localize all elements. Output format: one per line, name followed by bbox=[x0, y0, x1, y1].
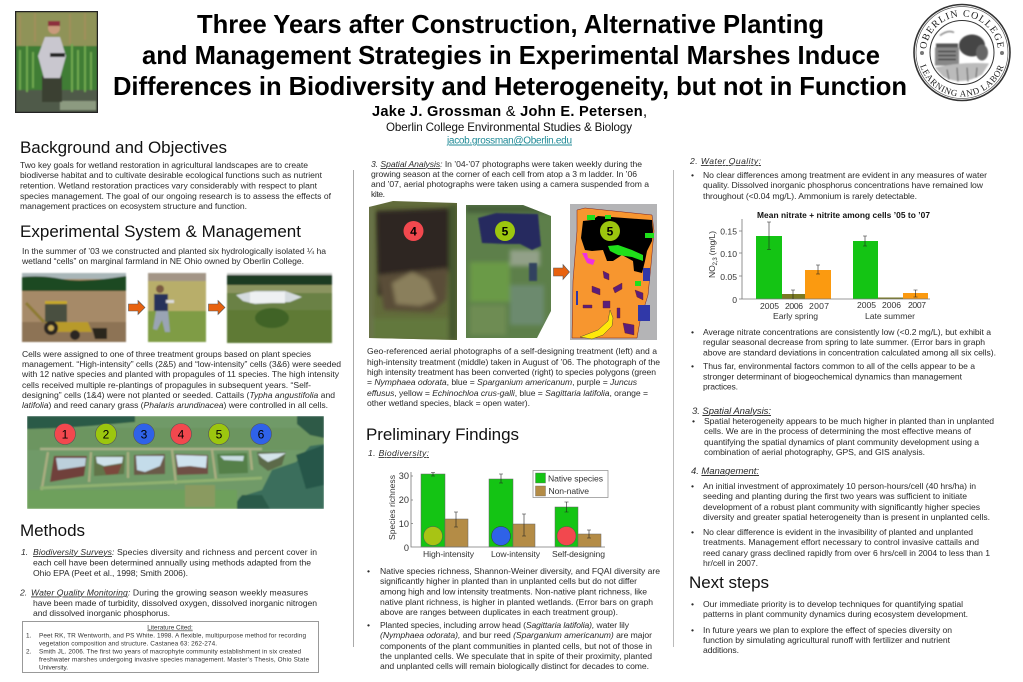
bullet text: future years: function by simulating agricultural runoff with fertilizer and nutrient bbox=[703, 635, 951, 645]
bullet text: priority: Our immediate priority is to develop techniques for quantifying spatial bbox=[703, 599, 963, 609]
text block: treatment groups: with 12 native species and planted with propagules of 11 species. The high intensity bbox=[21, 369, 340, 379]
bar chart: species richness bbox=[387, 470, 608, 559]
affiliation: Oberlin College Environmental Studies & Biology bbox=[386, 121, 632, 134]
bullet text: richness: among high and low intensity treatments. Non-native plant richness, like bbox=[380, 586, 647, 596]
caption bbox=[367, 346, 660, 408]
y axis tick labels: 20 bbox=[399, 495, 409, 505]
species polygon map bbox=[570, 204, 657, 340]
text block: treatment groups: Cells were assigned to one of three treatment groups based on plant species bbox=[22, 349, 311, 359]
intro text: wetland “cells” on marginal farmland in NE Ohio owned by Oberlin College. bbox=[21, 256, 304, 266]
bullet text: future years: In future years we plan to explore the effect of species diversity on bbox=[703, 625, 952, 635]
text block: treatment groups: cells received multiple re-plantings of propagules in subsequent years. “Self- bbox=[22, 380, 311, 390]
treatment circles bbox=[424, 526, 442, 546]
chart title: Mean nitrate + nitrite among cells ’05 to ’07 bbox=[757, 210, 930, 220]
y axis tick labels: 0 bbox=[732, 295, 737, 305]
y axis tick labels: 0 bbox=[404, 543, 409, 553]
photo: restored wetland bbox=[227, 273, 332, 343]
species polygon map: 5 bbox=[607, 224, 614, 238]
bullet text: nitrate: above are standard deviations in concentration calculated among all six cells). bbox=[703, 348, 996, 358]
icon: Oberlin College seal bbox=[913, 4, 1011, 102]
bullet text: richness bbox=[367, 566, 660, 617]
bullet text: investment: diversity and greater spatial heterogeneity than is present in unplanted cells. bbox=[703, 512, 990, 522]
photo: high-intensity cell 5 bbox=[466, 205, 551, 338]
panel: spatial analysis method bbox=[367, 159, 660, 408]
literature cited box: University. bbox=[39, 664, 68, 672]
email: jacob.grossman@Oberlin.edu bbox=[446, 136, 572, 146]
text block: treatment groups: designing” cells (1&4) were not planted or seeded. Cattails (Typha angustifolia and bbox=[22, 390, 335, 400]
legend bbox=[533, 470, 608, 498]
bullet text: investment: An initial investment of approximately 10 person-hours/cell (40 hrs/ha) in bbox=[703, 481, 976, 491]
legend: Non-native bbox=[548, 486, 589, 496]
y axis tick labels: 0.05 bbox=[720, 272, 737, 282]
method 1: each cell have been determined annually using methods adapted from the bbox=[33, 558, 311, 568]
x axis labels: 2007 bbox=[908, 300, 926, 310]
cell number markers: 3 bbox=[141, 428, 148, 442]
panel: preliminary findings bbox=[366, 425, 660, 671]
y axis tick labels: 0.10 bbox=[720, 249, 737, 259]
y axis tick labels: 10 bbox=[399, 519, 409, 529]
bars bbox=[421, 474, 601, 547]
caption: effusus, yellow = Echinochloa crus-galli, blue = Sagittaria latifolia, orange = bbox=[367, 388, 648, 398]
text block: retention. Wetland restoration practices vary considerably with respect to plant bbox=[20, 180, 318, 190]
bullet text: environmental factors bbox=[691, 361, 975, 392]
text block: management practices on ecosystem structure and function. bbox=[20, 201, 247, 211]
bullet text: future years: • bbox=[691, 625, 694, 635]
y axis title: Species richness bbox=[387, 475, 397, 540]
panel: spatial analysis findings bbox=[692, 406, 994, 457]
method 2: 2. bbox=[19, 588, 27, 598]
arrow bbox=[554, 264, 570, 280]
title: Differences in Biodiversity and Heterogeneity, but not in Function bbox=[113, 73, 907, 101]
photo: planting in field bbox=[148, 273, 206, 342]
literature cited box: freshwater marshes undergoing invasive species management. Master’s Thesis, Ohio State bbox=[39, 656, 309, 664]
bullet text: planted species bbox=[367, 620, 652, 671]
subheading: 4. Management: bbox=[691, 466, 759, 477]
heading: Experimental System & Management bbox=[20, 222, 301, 241]
literature cited box: vegetation composition and structure. Castanea 63: 262-274. bbox=[39, 640, 217, 648]
legend: Native species bbox=[548, 474, 603, 484]
arrow bbox=[208, 300, 225, 314]
x axis labels: 2007 bbox=[809, 301, 829, 311]
bullet text: priority: • bbox=[691, 599, 694, 609]
text block: growing season at the corner of each cell from atop a 3 m ladder. In ’06 bbox=[371, 169, 637, 179]
bullet text bbox=[692, 416, 994, 457]
caption: high-intensity treatment (middle) taken in August of ’06. The photograph of the bbox=[367, 357, 660, 367]
cell number markers: 4 bbox=[178, 428, 185, 442]
heading: Preliminary Findings bbox=[366, 425, 519, 444]
bullet text: invasibility: hr/cell in 2007. bbox=[703, 558, 758, 568]
bullet text: nitrate: • bbox=[691, 327, 694, 337]
bullet text: invasibility bbox=[691, 527, 990, 568]
x axis labels: Low-intensity bbox=[491, 549, 541, 559]
x axis labels: 2006 bbox=[785, 301, 803, 311]
bullet text: richness: Native species richness, Shannon-Weiner diversity, and FQAI diversity are bbox=[380, 566, 660, 576]
bullet text: planted species: (Nymphaea odorata), and bur reed (Sparganium americanum) are major bbox=[380, 630, 652, 640]
literature cited box: Smith JL. 2006. The first two years of macrophyte community establishment in six created bbox=[39, 648, 301, 656]
bullet text: future years bbox=[691, 625, 952, 655]
literature cited box: 1. bbox=[26, 632, 32, 640]
bullet text: planted species: and unplanted cells will remain biologically distinct for decades to come. bbox=[380, 661, 649, 671]
heading: Background and Objectives bbox=[20, 138, 227, 157]
literature cited box bbox=[22, 622, 318, 672]
caption: high intensity treatment has been converted (right) to species polygons (green bbox=[367, 367, 656, 377]
bullet text bbox=[691, 170, 987, 201]
bullet text: planted species: Planted species, including arrow head (Sagittaria latifolia), water lily bbox=[380, 620, 630, 630]
method 2: and dissolved inorganic phosphorus. bbox=[33, 608, 170, 618]
x axis labels: Late summer bbox=[865, 311, 915, 321]
title: Three Years after Construction, Alternative Planting bbox=[197, 11, 824, 39]
column rule right bbox=[673, 170, 674, 647]
bullet text: environmental factors: stronger determinant of biogeochemical dynamics than management bbox=[703, 372, 963, 382]
bullet text: invasibility: • bbox=[691, 527, 694, 537]
text block: and ’07, aerial photographs were taken using a camera suspended from a bbox=[371, 179, 649, 189]
cell number markers: 2 bbox=[103, 428, 110, 442]
panel: background and objectives bbox=[20, 138, 332, 211]
method 1 bbox=[21, 547, 317, 578]
bullet text: richness: significantly higher in planted than in unplanted cells but do not differ bbox=[380, 576, 637, 586]
panel: experimental system and management bbox=[20, 222, 341, 509]
cell number markers: 6 bbox=[258, 428, 265, 442]
arrow bbox=[128, 300, 145, 314]
bullet text: priority: patterns in plant community dynamics during ecosystem development. bbox=[703, 609, 968, 619]
literature cited box: Peet RK, TR Wentworth, and PS White. 1998. A flexible, multipurpose method for recording bbox=[39, 632, 306, 640]
bullet text: planted species: components of the plant communities in planted cells, but not of those in bbox=[380, 641, 652, 651]
text block: kite. bbox=[371, 189, 385, 199]
method 2: have been made of turbidity, dissolved oxygen, dissolved inorganic nitrogen bbox=[33, 598, 317, 608]
bullet text: priority bbox=[691, 599, 968, 619]
axes bbox=[411, 472, 605, 547]
bullet text: invasibility: treatments. Management effort necessary to control invasive cattails and bbox=[703, 537, 979, 547]
bullet text: planted species: the unplanted cells. We speculate that in spite of their proximity, planted bbox=[380, 651, 652, 661]
caption: other wetland species, black = open water). bbox=[367, 398, 530, 408]
photo: high-intensity cell 5: 5 bbox=[502, 224, 509, 238]
bullet text: quantifying the spatial dynamics of plant community development using a bbox=[704, 437, 979, 447]
bullet text: future years: additions. bbox=[703, 645, 739, 655]
column rule left bbox=[353, 170, 354, 647]
bullet text: investment bbox=[691, 481, 990, 522]
method 1: Biodiversity Surveys: Species diversity and richness and percent cover in bbox=[33, 547, 317, 557]
bullet text: nitrate bbox=[691, 327, 996, 358]
y axis title: NO bbox=[707, 265, 717, 278]
bullet text: quality. Dissolved inorganic phosphorus concentrations have remained low bbox=[703, 180, 984, 190]
bullet text: investment: development of a robust plant community with significantly higher species bbox=[703, 502, 980, 512]
icon: Oberlin College seal: OBERLIN COLLEGE bbox=[920, 10, 1004, 48]
text block: 3. Spatial Analysis: In ’04-’07 photographs were taken weekly during the bbox=[371, 159, 642, 169]
photo: self-designing cell 4: 4 bbox=[410, 224, 417, 238]
bullet text: investment: seeding and planting during the first two years was sufficient to initiate bbox=[703, 491, 967, 501]
text block bbox=[371, 159, 649, 199]
error bars bbox=[767, 222, 918, 299]
subheading: 2. Water Quality: bbox=[689, 156, 762, 166]
error bars bbox=[431, 472, 591, 538]
text block: treatment groups: management. “High-intensity” cells (2&5) and “low-intensity” cells (3&6) were seeded bbox=[22, 359, 341, 369]
caption: Geo-referenced aerial photographs of a self-designing treatment (left) and a bbox=[367, 346, 657, 356]
y axis tick labels: 30 bbox=[399, 471, 409, 481]
method 1: 1. bbox=[21, 547, 28, 557]
bullet text: richness: • bbox=[367, 566, 370, 576]
authors: Jake J. Grossman & John E. Petersen, bbox=[372, 104, 647, 120]
literature cited box: Literature Cited: bbox=[147, 624, 193, 632]
bullet text: richness: above are ranges between duplicates in each treatment group). bbox=[380, 607, 618, 617]
x axis labels: Early spring bbox=[773, 311, 818, 321]
y axis tick labels bbox=[399, 471, 409, 553]
subheading: 3. Spatial Analysis: bbox=[692, 406, 771, 417]
cell number markers: 5 bbox=[216, 428, 223, 442]
bullet text: cells. We are in the process of determining the most effective means of bbox=[704, 426, 972, 436]
bullet text: planted species: • bbox=[367, 620, 370, 630]
y axis tick labels: 0.15 bbox=[720, 226, 737, 236]
heading: Methods bbox=[20, 521, 85, 540]
literature cited box: 2. bbox=[26, 648, 32, 656]
title: and Management Strategies in Experimental Marshes Induce bbox=[142, 42, 880, 70]
bullet text: invasibility: reed canary grass declined rapidly from over 6 hrs/cell in 2004 to less than 1 bbox=[703, 548, 990, 558]
icon: Oberlin College seal: LEARNING AND LABOR bbox=[920, 64, 1004, 97]
photo: backhoe on bare soil bbox=[22, 273, 126, 342]
text block: biodiverse habitat and to cultivate desirable ecological functions such as nutrient bbox=[20, 170, 323, 180]
heading: Next steps bbox=[689, 573, 769, 592]
panel: management bbox=[691, 466, 990, 568]
x axis labels: 2006 bbox=[882, 300, 901, 310]
bullet text: environmental factors: practices. bbox=[703, 382, 738, 392]
bullet text: investment: • bbox=[691, 481, 694, 491]
bullet text: throughout (<0.04 mg/L). Ammonium is rarely detectable. bbox=[703, 191, 917, 201]
axes bbox=[739, 219, 930, 299]
bullet text: • bbox=[692, 416, 695, 426]
caption: = Nymphaea odorata, blue = Sparganium americanum, purple = Juncus bbox=[367, 377, 638, 387]
bars bbox=[756, 236, 928, 299]
bar chart: nitrate + nitrite bbox=[707, 210, 930, 321]
bullet text: No clear differences among treatment are evident in any measures of water bbox=[703, 170, 987, 180]
intro text bbox=[21, 246, 326, 266]
bullet text: nitrate: Average nitrate concentrations are consistently low (<0.2 mg/L), but exhibit a bbox=[703, 327, 991, 337]
method 2 bbox=[19, 588, 317, 618]
bullet text: • bbox=[691, 170, 694, 180]
text block bbox=[20, 160, 332, 211]
bullet text: invasibility: No clear difference is evident in the invasibility of planted and unplanted bbox=[703, 527, 973, 537]
bullet text: richness: native plant richness, is higher in planted wetlands. (Error bars on graph bbox=[380, 597, 653, 607]
cell number markers bbox=[54, 424, 272, 444]
text block: Two key goals for wetland restoration in agricultural landscapes are to create bbox=[20, 160, 308, 170]
y axis title: (mg/L) bbox=[707, 231, 717, 257]
bullet text: nitrate: regular seasonal decrease from spring to late summer. (Error bars in graph bbox=[703, 337, 985, 347]
intro text: In the summer of ’03 we constructed and planted six hydrologically isolated ¼ ha bbox=[22, 246, 326, 256]
y axis title: 2,3 bbox=[713, 257, 719, 265]
x axis labels bbox=[423, 549, 605, 559]
photo: self-designing cell 4 bbox=[369, 201, 457, 340]
x axis labels: 2005 bbox=[760, 301, 779, 311]
x axis labels: High-intensity bbox=[423, 549, 475, 559]
panel: methods bbox=[19, 521, 318, 672]
method 2: Water Quality Monitoring: During the growing season weekly measures bbox=[31, 588, 308, 598]
text block: treatment groups bbox=[21, 349, 341, 410]
bullet text: Spatial heterogeneity appears to be much higher in planted than in unplanted bbox=[704, 416, 994, 426]
text block: treatment groups: latifolia) and reed canary grass (Phalaris arundinacea) were controlled in all cells. bbox=[22, 400, 328, 410]
panel: water quality bbox=[689, 156, 996, 392]
text block: species management. The goal of our ongoing research is to assess the effects of bbox=[20, 191, 332, 201]
y axis tick labels bbox=[720, 226, 737, 305]
method 1: Ohio EPA (Peet et al., 1998; Smith 2006). bbox=[33, 568, 188, 578]
photo: researcher in marsh bbox=[15, 11, 98, 113]
x axis labels: Self-designing bbox=[552, 549, 605, 559]
x axis labels: 2005 bbox=[857, 300, 876, 310]
bullet text: environmental factors: • bbox=[691, 361, 694, 371]
panel: next steps bbox=[689, 573, 968, 655]
photo: aerial view of six cells bbox=[27, 416, 324, 509]
title bbox=[113, 11, 907, 101]
cell number markers: 1 bbox=[62, 428, 69, 442]
bullet text: combination of aerial photography, GPS, and GIS analysis. bbox=[704, 447, 925, 457]
bullet text: environmental factors: Thus far, environmental factors common to all of the cells appear to be a bbox=[703, 361, 975, 371]
subheading: 1. Biodiversity: bbox=[368, 448, 430, 458]
x axis labels bbox=[760, 300, 926, 321]
